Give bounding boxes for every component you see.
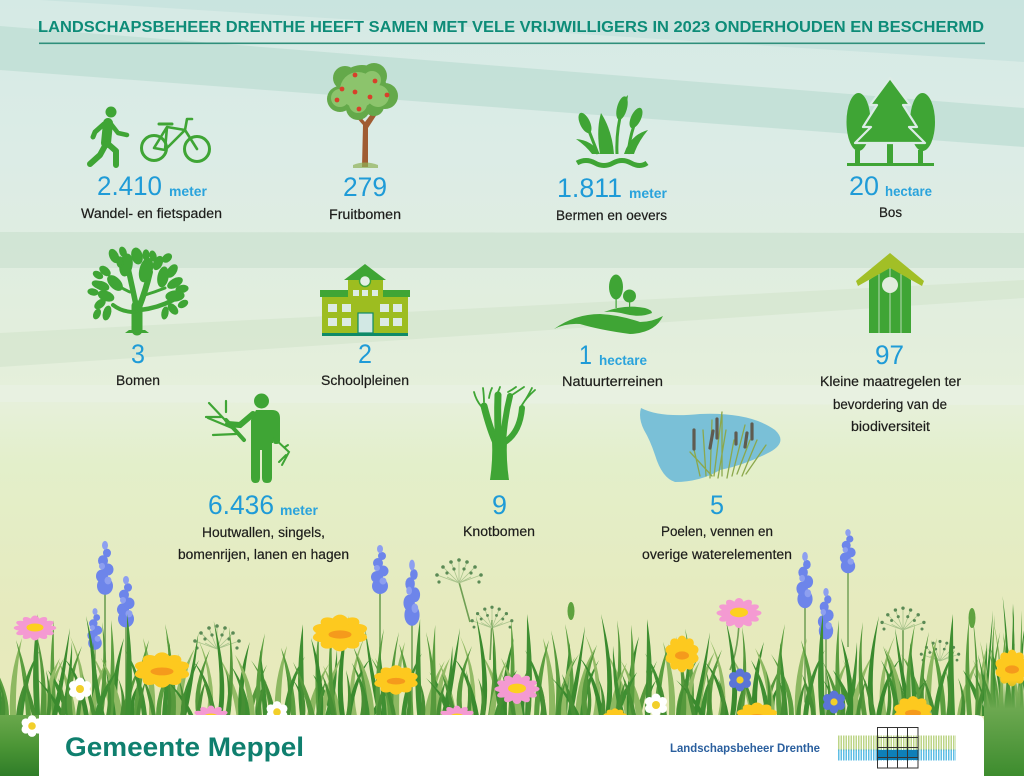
stat: schoolpleinen: Schoolpleinen [321, 373, 409, 388]
stat: kleine maatregelen: 97 [875, 340, 904, 370]
grass blades [0, 596, 1024, 716]
organisation logo [838, 728, 956, 768]
lavender stalks and umbels [87, 529, 960, 736]
stat: bermen en oevers [556, 95, 668, 223]
icon: school building [320, 264, 410, 336]
stat: houtwallen [178, 394, 349, 562]
stat: houtwallen: bomenrijen, lanen en hagen [178, 547, 349, 562]
stat: knotbomen [463, 387, 535, 539]
icon: reeds and water [576, 95, 648, 166]
stat: bos [846, 78, 935, 220]
icon: landscape hill with trees [554, 274, 663, 334]
stat: bos: 20 [849, 171, 879, 201]
stat: schoolpleinen: 2 [358, 339, 372, 369]
footer panel [39, 715, 984, 776]
stat: fruitbomen: 279 [343, 172, 387, 202]
stat: poelen: Poelen, vennen en [661, 524, 773, 539]
icon: birdhouse [856, 253, 924, 333]
meadow: flowers and grass [0, 529, 1024, 736]
stat: houtwallen: meter [280, 503, 319, 518]
stat: bermen en oevers: 1.811 [557, 173, 622, 203]
municipality name: Gemeente Meppel [65, 732, 304, 762]
stat: kleine maatregelen [820, 253, 962, 434]
footer: side grass [0, 680, 1024, 776]
stat: poelen [640, 408, 792, 562]
organisation name: Landschapsbeheer Drenthe [670, 741, 820, 755]
stat: knotbomen: Knotbomen [463, 524, 535, 539]
stat: bermen en oevers: Bermen en oevers [556, 208, 667, 223]
icon: pollard willow [474, 387, 535, 480]
stat: bomen [88, 246, 189, 388]
stat: bos: Bos [879, 205, 902, 220]
icon: forest trees [846, 78, 935, 166]
stat: poelen: overige waterelementen [642, 547, 792, 562]
stat: wandel- en fietspaden: Wandel- en fietspaden [81, 206, 222, 221]
stat: wandel- en fietspaden: meter [169, 184, 208, 199]
icon: fruit tree [327, 63, 398, 168]
stat: natuurterreinen: hectare [599, 353, 647, 368]
stat: bomen: Bomen [116, 373, 160, 388]
stat: fruitbomen [327, 63, 401, 222]
stat: kleine maatregelen: biodiversiteit [851, 419, 930, 434]
icon: walker and bicycle [90, 106, 210, 165]
stat: wandel- en fietspaden [81, 106, 222, 221]
stat: kleine maatregelen: bevordering van de [833, 397, 947, 412]
stat: poelen: 5 [710, 490, 724, 520]
flower heads [14, 598, 1024, 730]
stat: natuurterreinen [554, 274, 663, 389]
title: LANDSCHAPSBEHEER DRENTHE HEEFT SAMEN MET VELE VRIJWILLIGERS IN 2023 ONDERHOUDEN EN BESCHERMD [38, 19, 984, 36]
stat: bos: hectare [885, 184, 932, 199]
icon: pond with reeds [640, 408, 780, 482]
stat: natuurterreinen: Natuurterreinen [562, 374, 663, 389]
stat: houtwallen: Houtwallen, singels, [202, 525, 325, 540]
icon: person carrying branches [206, 394, 289, 483]
stat: bomen: 3 [131, 339, 145, 369]
stat: fruitbomen: Fruitbomen [329, 207, 401, 222]
stat: schoolpleinen [320, 264, 410, 388]
stat: bermen en oevers: meter [629, 186, 668, 201]
stat: houtwallen: 6.436 [208, 490, 274, 520]
icon: leafy tree [88, 246, 189, 333]
stat: kleine maatregelen: Kleine maatregelen ter [820, 374, 962, 389]
stat: wandel- en fietspaden: 2.410 [97, 171, 162, 201]
stat: natuurterreinen: 1 [579, 340, 592, 370]
stat: knotbomen: 9 [492, 490, 507, 520]
